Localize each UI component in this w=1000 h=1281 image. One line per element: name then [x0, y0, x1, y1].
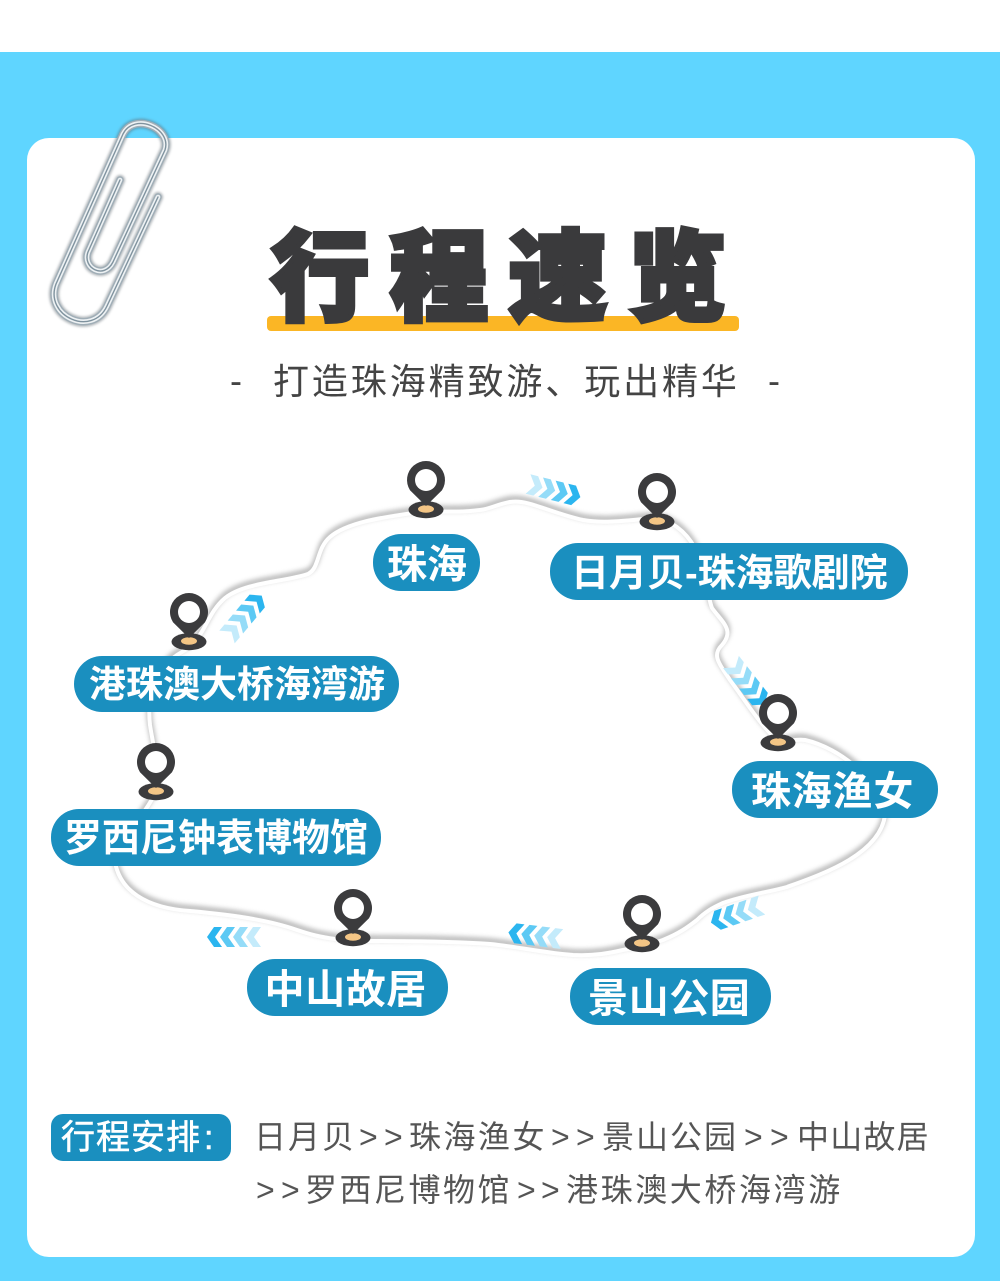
schedule line 2: > [517, 1172, 538, 1208]
subtitle: - [230, 360, 242, 401]
schedule badge [51, 1114, 231, 1161]
label pill [732, 761, 938, 818]
arrows: top right [526, 474, 583, 507]
arrows: upper left [219, 589, 269, 643]
icon: map pin [407, 461, 445, 518]
label text: 港珠澳大桥海湾游 [89, 664, 385, 705]
schedule line 1: 珠海渔女 [409, 1119, 547, 1155]
stop: 中山故居 [247, 889, 448, 1016]
schedule [51, 1114, 930, 1208]
title text: 行程速览 [271, 223, 747, 333]
schedule badge text: : [204, 1119, 214, 1157]
schedule line 1: 景山公园 [602, 1119, 738, 1155]
label pill [550, 543, 908, 600]
arrows: right side [723, 656, 772, 711]
schedule badge text: 行程安排 [61, 1119, 201, 1157]
route line [115, 499, 885, 955]
icon: map pin [137, 743, 175, 800]
icon: paperclip [54, 123, 166, 322]
label pill [51, 809, 381, 866]
subtitle: - [768, 360, 780, 401]
schedule line 2: > [541, 1172, 562, 1208]
schedule line 2: 罗西尼博物馆 [305, 1172, 512, 1208]
label text: 珠海 [387, 543, 467, 587]
icon: map pin [759, 694, 797, 751]
label text: 日月贝-珠海歌剧院 [571, 553, 888, 595]
label pill [74, 656, 399, 712]
schedule line 2: > [256, 1172, 277, 1208]
schedule line 1: 日月贝 [254, 1119, 356, 1155]
stop: 珠海 [373, 461, 480, 591]
schedule line 1: > [576, 1119, 597, 1155]
schedule line 1: > [744, 1119, 765, 1155]
schedule line 1: > [384, 1119, 405, 1155]
stop: 日月贝-珠海歌剧院 [550, 473, 908, 600]
schedule line 2: > [281, 1172, 302, 1208]
schedule line 2: 港珠澳大桥海湾游 [566, 1172, 843, 1208]
stop: 景山公园 [570, 895, 771, 1025]
title underline [267, 316, 739, 331]
schedule line 1: > [359, 1119, 380, 1155]
icon: map pin [623, 895, 661, 952]
label pill [247, 959, 448, 1016]
icon: map pin [170, 593, 208, 650]
label text: 珠海渔女 [751, 770, 914, 814]
label text: 罗西尼钟表博物馆 [64, 818, 368, 860]
schedule line 1: > [770, 1119, 791, 1155]
schedule line 1: 中山故居 [797, 1119, 930, 1155]
stop: 港珠澳大桥海湾游 [74, 593, 399, 712]
arrows: lower right [708, 896, 765, 932]
icon: map pin [334, 889, 372, 946]
label text: 景山公园 [588, 977, 750, 1021]
label pill [570, 968, 771, 1025]
label text: 中山故居 [264, 968, 427, 1012]
icon: map pin [638, 473, 676, 530]
stop: 珠海渔女 [732, 694, 938, 818]
label pill [373, 534, 480, 591]
arrows: bottom left [207, 927, 261, 947]
arrows: bottom centre [507, 922, 563, 949]
title [267, 223, 747, 333]
schedule line 1: > [551, 1119, 572, 1155]
stop: 罗西尼钟表博物馆 [51, 743, 381, 866]
subtitle: 打造珠海精致游、玩出精华 [273, 361, 740, 402]
